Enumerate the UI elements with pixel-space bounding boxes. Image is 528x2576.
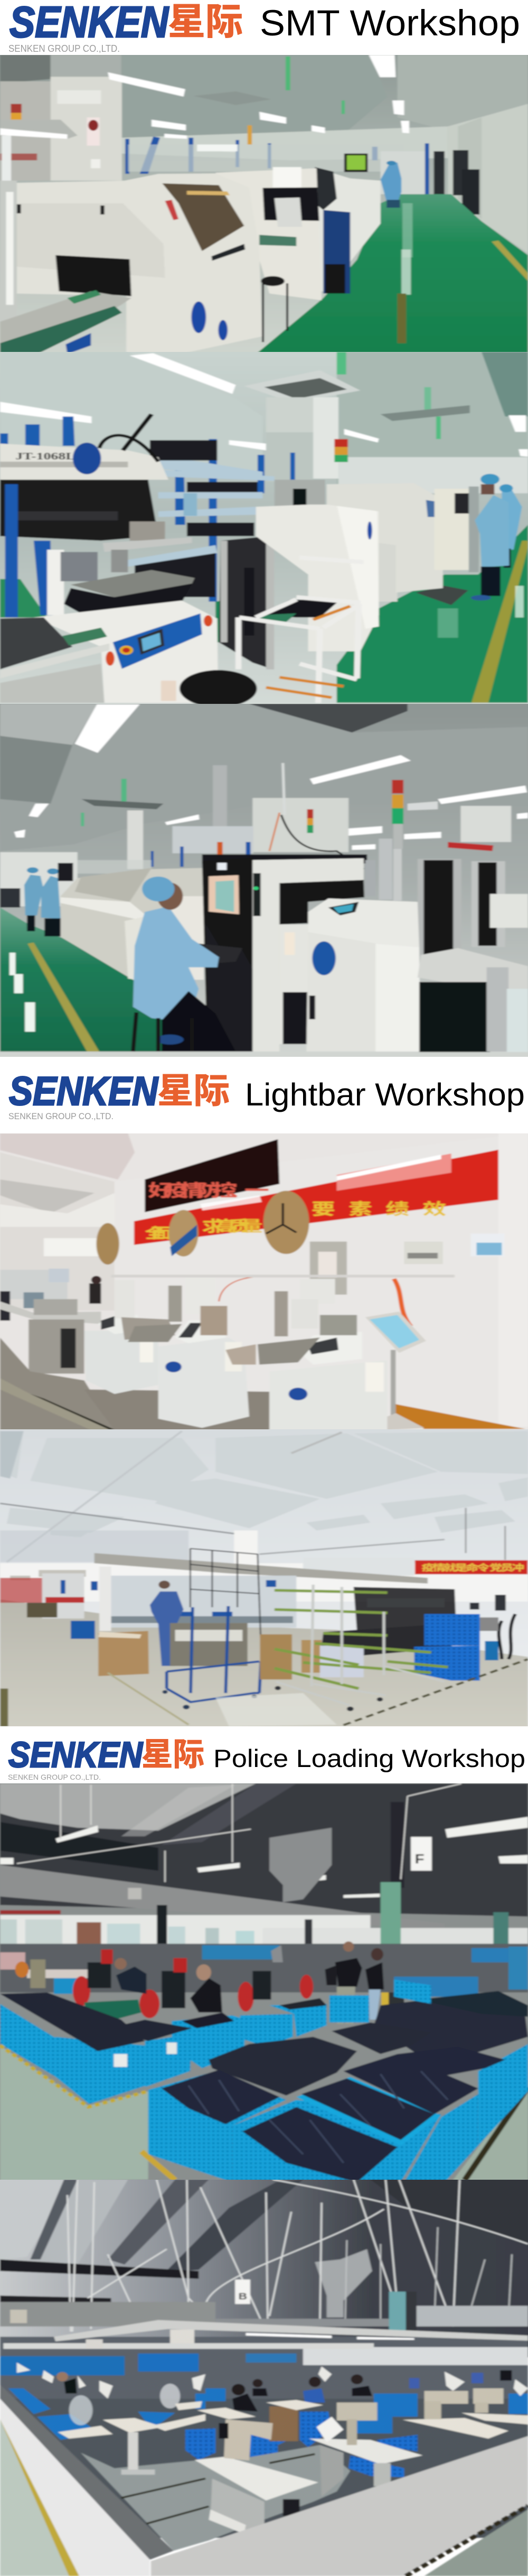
section title: Police Loading Workshop: [213, 1744, 525, 1772]
crates left stacks: [0, 1993, 192, 2104]
benches with parts: [0, 1574, 296, 1628]
roof: [0, 1783, 528, 1917]
company name: SENKEN GROUP CO.,LTD.: [8, 43, 120, 54]
floor lines: [344, 1659, 528, 1725]
header: Lightbar Workshop: [8, 1069, 525, 1121]
crates back row: [172, 1995, 369, 2068]
workstation strip: [0, 1943, 528, 1993]
shop floor backdrop: [0, 2398, 528, 2538]
stacker tower and cart: [219, 480, 325, 669]
inspection machine: [202, 854, 367, 1052]
stencil printer head: [0, 414, 192, 552]
photo: stencil printer and workers in SMT line: [0, 349, 528, 710]
cabinet machine: [256, 505, 398, 652]
stool: [180, 670, 257, 707]
printer frame: [5, 484, 52, 617]
photo: police gear loading floor with blue crates: [0, 1779, 528, 2186]
logo: Chinese mark: 星际: [142, 1737, 204, 1772]
worker in blue: [150, 1580, 184, 1666]
floor: [0, 907, 215, 1052]
column: [234, 1530, 258, 1567]
photo: lightbar terminal machines with red banner: [0, 1130, 528, 1433]
logo: SENKEN wordmark: SENKEN: [8, 1735, 144, 1775]
B sign: B: [239, 2291, 247, 2302]
hanging pipes: [68, 2180, 528, 2331]
F sign: [411, 1837, 432, 1871]
conveyor machine: [418, 948, 528, 1052]
white paper patterns: [17, 2363, 528, 2398]
photo: SMT line with printer and reflow machines: [0, 50, 528, 357]
right racks: [365, 839, 528, 956]
ceiling lights: [14, 704, 528, 850]
far wall and windows: [0, 1563, 528, 1602]
long machine row: [315, 154, 381, 293]
loading table: [0, 617, 109, 703]
cart: [239, 557, 364, 703]
bench: [0, 1299, 101, 1374]
header: Police Loading Workshop: [8, 1735, 525, 1781]
photo: lightbar assembly hall with racks: [0, 1427, 528, 1732]
back wall: [338, 457, 528, 493]
post and panel: [387, 2292, 417, 2433]
feeder machine with monitor: [215, 167, 322, 300]
background workers: [24, 863, 73, 936]
photo: reflow oven and seated operator: [0, 698, 528, 1063]
header: SMT Workshop: [8, 0, 520, 54]
red banner: 全面: [145, 1226, 172, 1242]
stack light tall: [392, 780, 403, 849]
workers: [471, 474, 522, 600]
company name: SENKEN GROUP CO.,LTD.: [8, 1111, 114, 1121]
sewing station front: [195, 2419, 318, 2534]
green pole rack: [275, 1585, 448, 1711]
back shelves and cases: [381, 143, 479, 215]
banner: [415, 1560, 527, 1574]
worker: [381, 161, 401, 208]
conveyor: [0, 290, 131, 354]
posts: [157, 1882, 508, 2008]
floor: [0, 2045, 148, 2182]
LED sign: 好疫情防控、一: [148, 1182, 269, 1200]
light rail: [3, 2320, 528, 2349]
floor: [0, 1337, 115, 1430]
assembly bench tops: [10, 1553, 428, 1584]
right partition: [151, 2436, 528, 2576]
column: [266, 397, 338, 482]
sewing station mid right: [309, 2403, 422, 2497]
electrical boxes: [310, 1234, 504, 1295]
workers: [115, 1941, 384, 2024]
blue bins back: [0, 2354, 296, 2375]
ducts: [0, 1828, 445, 1931]
left partition: [0, 2385, 173, 2576]
middle workspace: [8, 2388, 528, 2440]
far people: [470, 1595, 506, 1611]
press table: [64, 550, 195, 629]
left wall and column: [0, 77, 122, 181]
white cabinet: [279, 898, 420, 1052]
machines behind: [327, 483, 479, 592]
logo: Chinese mark: 星际: [157, 1071, 230, 1110]
ceiling lights and vents: [0, 354, 528, 457]
table: [84, 2000, 142, 2020]
stencil printer head: JT-1068L: [15, 451, 76, 462]
wall: [0, 1910, 528, 1951]
back of shop: [0, 2337, 528, 2404]
hanging lamps: [0, 1817, 528, 1898]
logo: SENKEN wordmark: SENKEN: [9, 1069, 159, 1114]
skirting and foot: [395, 1404, 525, 1429]
gear piles right: [209, 1991, 528, 2096]
operator console: [34, 600, 218, 703]
workers: [56, 2370, 512, 2412]
terminal machine 3: [225, 1279, 387, 1430]
tape reels: [96, 1191, 309, 1264]
banner: 疫情就是命令 党员冲: [422, 1563, 524, 1573]
blue trolley: [162, 1549, 261, 1709]
left lamp and stack light: [0, 104, 78, 183]
section title: SMT Workshop: [260, 3, 520, 43]
company name: SENKEN GROUP CO.,LTD.: [8, 1773, 101, 1781]
stool: [261, 276, 288, 342]
riveting machines: [15, 1949, 313, 2018]
columns and duct: [127, 765, 511, 869]
red banner: [134, 1150, 498, 1245]
tables: [58, 2400, 528, 2439]
ceiling lights: [108, 55, 409, 152]
section title: Lightbar Workshop: [245, 1077, 525, 1112]
LED sign: [145, 1139, 279, 1212]
fans: [69, 2384, 180, 2425]
small stack light: [307, 810, 313, 833]
blue racking: [0, 416, 295, 602]
inner floor: [81, 2445, 350, 2551]
floor: [337, 525, 528, 703]
red banner: 求高质量: [202, 1218, 262, 1235]
terminal machine 2: [128, 1278, 249, 1428]
stack light: [334, 439, 348, 462]
printer machine: [14, 173, 262, 354]
logo: Chinese mark: 星际: [168, 1, 243, 42]
racks: [125, 137, 378, 174]
photo: sewing workshop seen from above: [0, 2177, 528, 2576]
background workstations: [0, 1269, 101, 1320]
blue crates: [414, 1614, 515, 1681]
seated worker: [133, 877, 252, 1052]
back shelves: [151, 842, 251, 867]
wall band: [0, 2302, 528, 2327]
floor: [256, 194, 528, 354]
large front crates: [148, 2044, 528, 2182]
duct: [315, 2249, 372, 2318]
red banner: 要素绩效: [312, 1201, 446, 1218]
reflow oven: [61, 868, 205, 981]
left aisle floor: [0, 2419, 79, 2576]
tablet stand: [365, 1312, 426, 1425]
back wall: [0, 852, 78, 906]
ceiling panels: [0, 1431, 528, 1537]
gear in crates: [162, 2047, 505, 2182]
F sign: F: [415, 1852, 425, 1866]
terminal machine 1: [84, 1280, 175, 1394]
floor: [0, 1599, 528, 1729]
B sign: [235, 2280, 250, 2304]
sewing machine rear right: [425, 2388, 504, 2419]
cardboard boxes: [98, 1631, 322, 1679]
harness stacks: [320, 1587, 458, 1677]
